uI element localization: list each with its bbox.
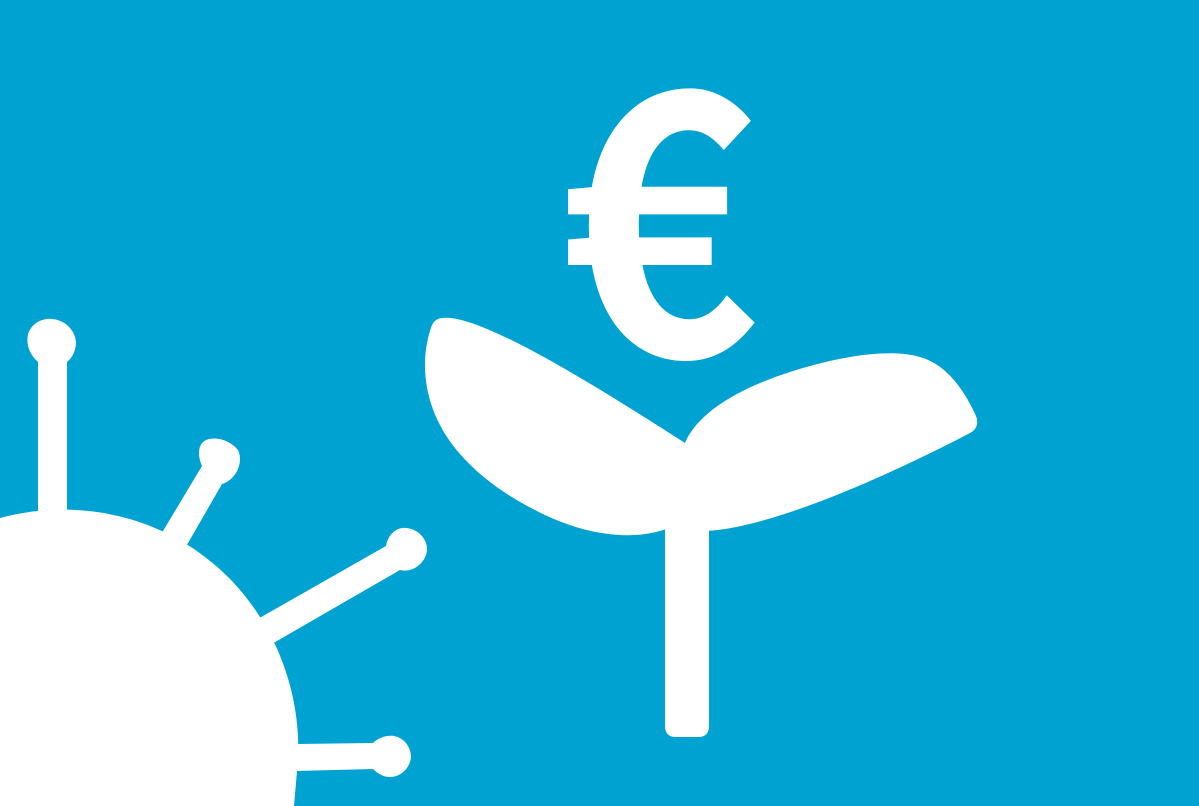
virus body bbox=[0, 510, 298, 806]
icon: seedling bbox=[425, 318, 977, 737]
icon: virus bbox=[0, 319, 427, 806]
spike: top bbox=[27, 319, 76, 515]
seedling stem bbox=[665, 510, 709, 737]
left leaf bbox=[425, 318, 700, 535]
spike: right bbox=[256, 528, 427, 645]
spike: lower bbox=[296, 736, 411, 777]
right leaf bbox=[670, 353, 977, 531]
spike: upper bbox=[160, 438, 240, 550]
